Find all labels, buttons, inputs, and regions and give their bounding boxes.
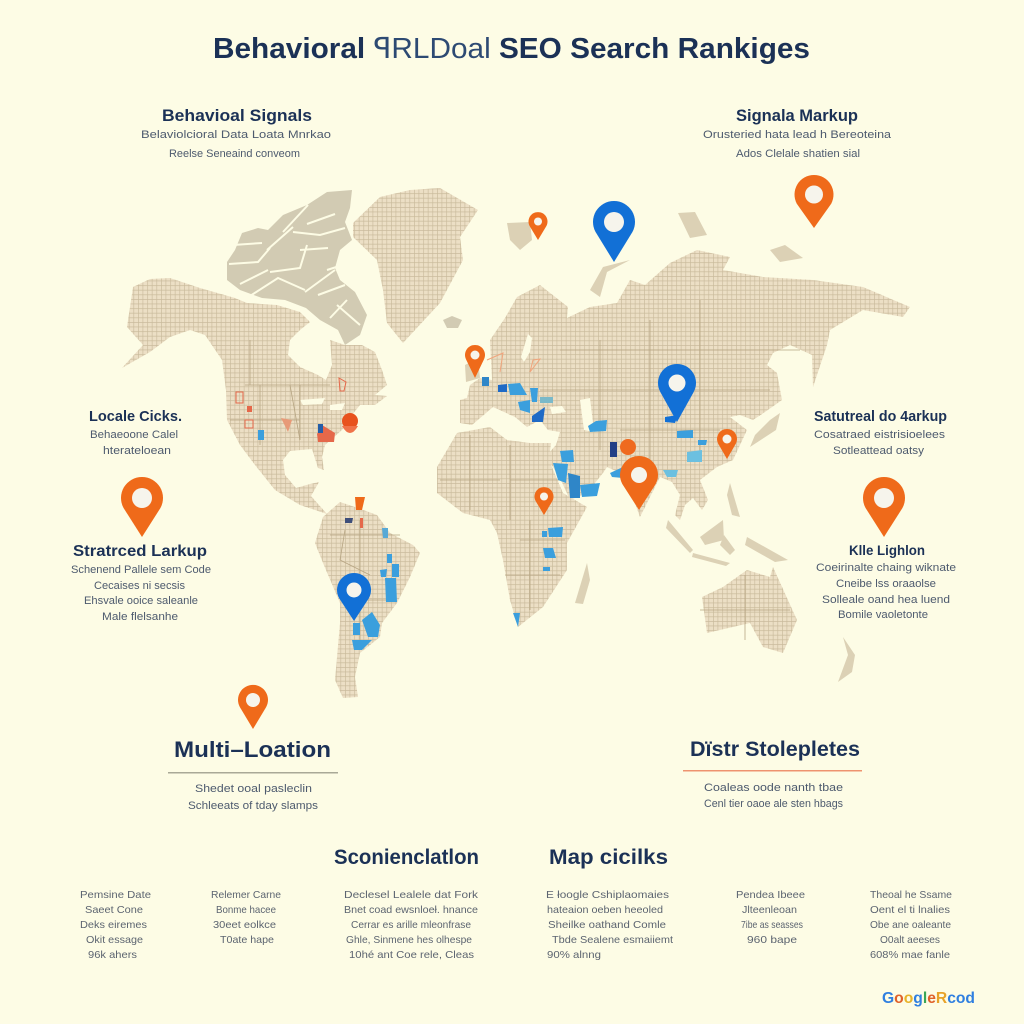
pin: top right orange (794, 175, 834, 228)
text block: Behavioal Signals: Reelse Seneaind conveom (169, 148, 300, 160)
text block: Klle Lighlon: Bomile vaoletonte (838, 609, 928, 621)
landmass: Arctic islands (227, 190, 462, 345)
text block: Klle Lighlon: Klle Lighlon (849, 542, 925, 558)
text block: Locale Cicks: hterateloean (103, 445, 171, 457)
water cut-outs (300, 334, 594, 432)
bottom column 4: hateaion oeben heeoled (547, 904, 663, 916)
landmass: Africa (437, 427, 587, 627)
bottom column 4 (546, 889, 673, 961)
text block: Behavioal Signals (141, 106, 331, 160)
bottom column 6: Oent el ti lnalies (870, 904, 950, 916)
text block: Satutreal do Markup: Sotleattead oatsy (833, 445, 925, 457)
landmass: islands (465, 212, 855, 682)
text block: Signala Markup (703, 106, 892, 160)
bottom column 6: O0alt aeeses (880, 934, 940, 946)
bottom column 4: Sheilke oathand Comle (548, 919, 666, 931)
bottom column 6: 608% mae fanle (870, 949, 950, 961)
bottom column 1: Saeet Cone (85, 904, 143, 916)
data patches: blue (258, 377, 707, 650)
heading: Map cicilks: Map cicilks (549, 846, 668, 869)
text block: Stratrced Larkup: Male flelsanhe (102, 611, 178, 623)
pin: right side orange (863, 477, 905, 537)
text block: Behavioal Signals: Belaviolcioral Data Loata Mnrkao (141, 129, 331, 141)
bottom column 1 (80, 889, 151, 961)
pin: Central Asia blue (658, 364, 696, 422)
landmass: Australia (702, 567, 797, 653)
text block: Multi-Loation: Shedet ooal pasleclin (195, 783, 312, 795)
pin: left side orange (121, 477, 163, 537)
country borders (230, 300, 800, 640)
text block: Klle Lighlon (816, 542, 956, 621)
bottom column 2: T0ate hape (220, 934, 274, 946)
bottom column 5: Jlteenleoan (742, 904, 797, 916)
bottom column 2: 30eet eolkce (213, 919, 276, 931)
text block: Locale Cicks: Behaeoone Calel (90, 429, 178, 441)
bottom column 2: Bonme hacee (216, 904, 276, 916)
bottom column 1: Okit essage (86, 934, 143, 946)
pin: UK orange (465, 345, 485, 378)
pin: East Africa orange (534, 487, 554, 515)
logo: Google Rcod: GoogleRcod (882, 990, 975, 1007)
bottom column 6: Theoal he Ssame (870, 889, 952, 901)
text block: Satutreal do Markup: Cosatraed eistrisioelees (814, 429, 946, 441)
text block: Multi-Loation: Schleeats of tday slamps (188, 800, 319, 812)
bottom column 1: 96k ahers (88, 949, 137, 961)
bottom column 3: Bnet coad ewsnloeł. hnance (344, 904, 478, 916)
text block: Signala Markup: Orusteried hata lead h Bereoteina (703, 129, 892, 141)
text block: Distr Stolepletes: Dïstr Stolepletes (690, 738, 860, 761)
text block: Signala Markup: Signala Markup (736, 106, 858, 125)
text block: Klle Lighlon: Coeirinalte chaing wiknate (816, 562, 956, 574)
text block: Distr Stolepletes: Coaleas oode nanth tbae (704, 782, 843, 794)
world map (122, 188, 910, 698)
bottom column 2 (211, 889, 281, 946)
bottom column 1: Deks eiremes (80, 919, 147, 931)
landmass: South America (315, 502, 420, 698)
text block: Satutreal do Markup (814, 408, 947, 457)
bottom column 5: 960 bape (747, 934, 797, 946)
pin: Arctic blue (593, 201, 635, 262)
text block: Signala Markup: Ados Clelale shatien sial (736, 148, 860, 160)
bottom column 5: Pendea Ibeee (736, 889, 805, 901)
bottom column 4: E łoogle Cshiplaomaies (546, 889, 669, 901)
bottom column 6: Obe ane oaleante (870, 919, 951, 931)
text block: Klle Lighlon: Solleale oand hea luend (822, 594, 950, 606)
bottom column 3: Declesel Lealele dat Fork (344, 889, 479, 901)
bottom column 5: 7ibe as seasses (741, 919, 803, 931)
pin: Svalbard orange (528, 212, 548, 240)
title: Behavioral ꟼRLDoal SEO Search Rankiges (213, 33, 810, 65)
text block: Stratrced Larkup: Ehsvale ooice saleanle (84, 595, 198, 607)
text block: Satutreal do Markup: Satutreal do 4arkup (814, 408, 947, 425)
pin: China orange (717, 429, 737, 459)
pin: India orange (620, 456, 658, 510)
bottom column 6 (870, 889, 952, 961)
text block: Locale Cicks (89, 408, 182, 457)
landmass: Eurasia (460, 250, 910, 520)
bottom column 3: 10hé ant Coe rele, Cleas (349, 949, 474, 961)
pin: South America blue (337, 573, 371, 621)
text block: Distr Stolepletes (683, 738, 862, 810)
text block: Multi-Loation: Multi–Loation (174, 737, 331, 762)
text block: Stratrced Larkup: Schenend Pallele sem Code (71, 564, 211, 576)
data patches: orange and red (236, 353, 540, 528)
text block: Behavioal Signals: Behavioal Signals (162, 106, 312, 125)
text block: Locale Cicks: Locale Cicks. (89, 408, 182, 425)
text block: Stratrced Larkup: Cecaises ni secsis (94, 580, 185, 592)
text block: Multi-Loation (168, 737, 338, 812)
bottom column 3: Ghle, Sinmene hes olhespe (346, 934, 472, 946)
heading: Sconienclatlon: Sconienclatlon (334, 846, 479, 869)
text block: Stratrced Larkup (71, 543, 211, 623)
bottom column 1: Pemsine Date (80, 889, 151, 901)
text block: Klle Lighlon: Cneibe lss oraaolse (836, 578, 936, 590)
marker: small orange dot, US east coast (342, 413, 358, 433)
pin: bottom left orange (238, 685, 268, 729)
bottom column 4: 90% alnng (547, 949, 601, 961)
text block: Stratrced Larkup: Stratrced Larkup (73, 543, 207, 560)
bottom column 5 (736, 889, 805, 946)
landmass: Greenland (353, 188, 478, 343)
marker: small orange dot, Middle East (620, 439, 636, 455)
landmass: North America (122, 278, 387, 514)
bottom column 3 (344, 889, 479, 961)
text block: Distr Stolepletes: Cenl tier oaoe ale sten hbags (704, 798, 843, 810)
bottom column 4: Tbde Sealene esmaiiemt (552, 934, 673, 946)
bottom column 2: Relemer Carne (211, 889, 281, 901)
bottom column 3: Cerrar es arille mleonfrase (351, 919, 471, 931)
